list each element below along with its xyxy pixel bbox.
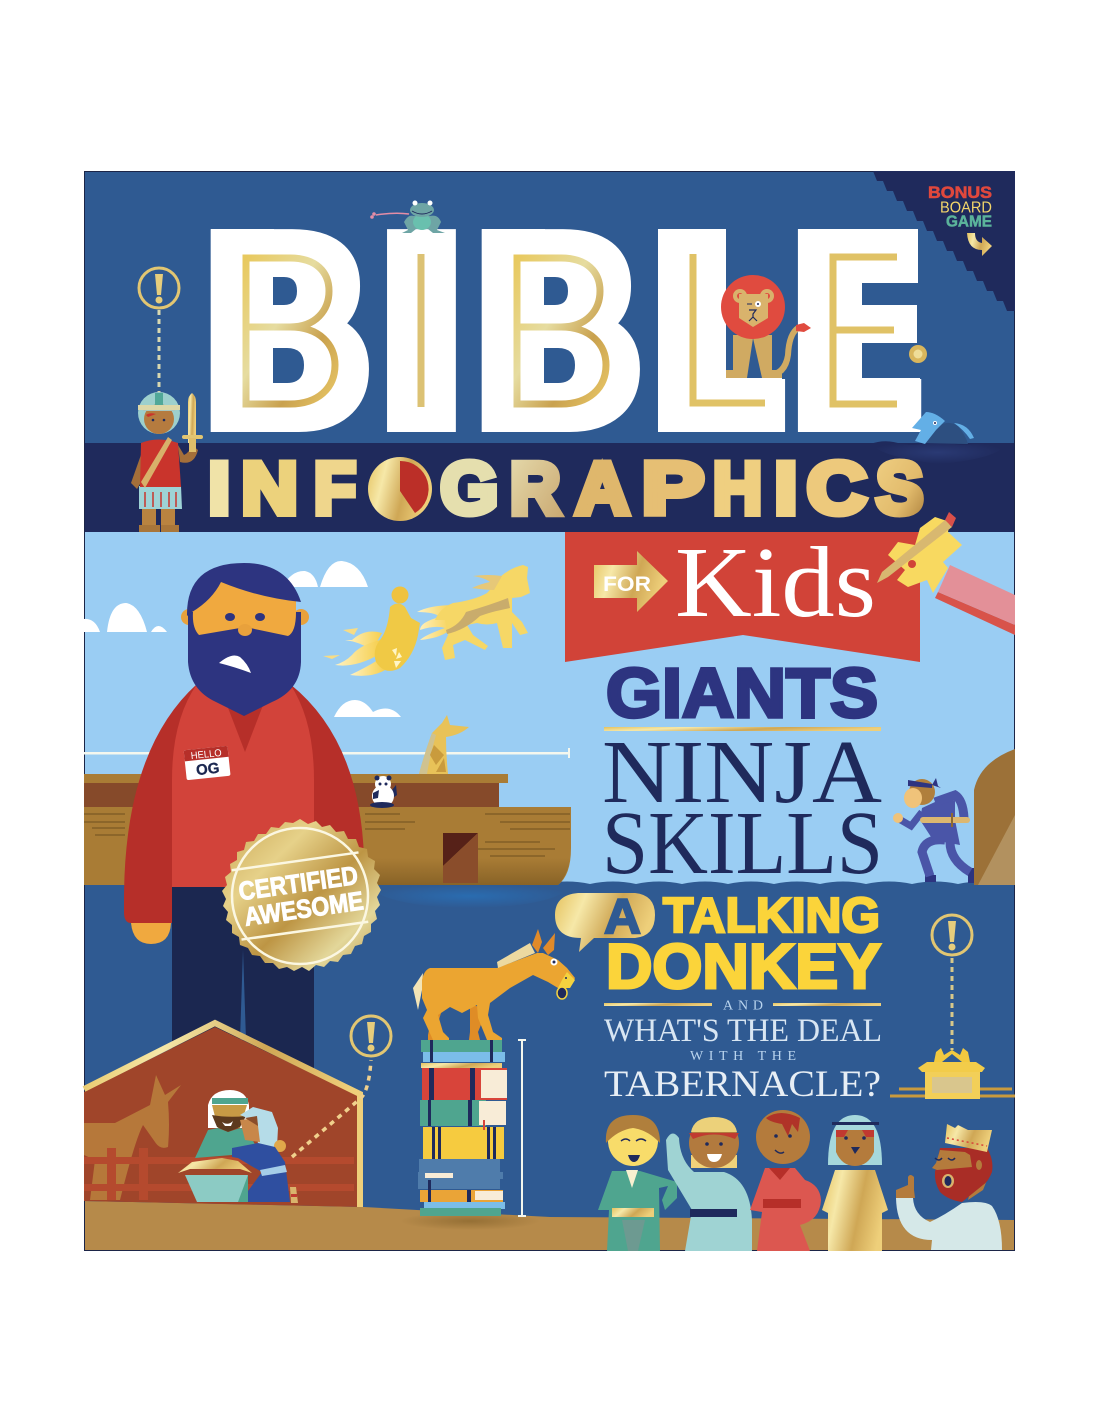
- title word BIBLE: B: [206, 185, 369, 476]
- icon: exclamation marker at stable: [351, 1016, 391, 1056]
- icon: exclamation marker and dashed line above soldier: [139, 268, 179, 392]
- gap between Og's legs: [240, 950, 246, 1040]
- certified awesome seal: AWESOME: [242, 885, 365, 932]
- certified awesome seal: CERTIFIED: [237, 860, 360, 906]
- child in gold robe: [822, 1115, 888, 1251]
- certified awesome seal: [222, 819, 381, 971]
- title word INFOGRAPHICS: H: [713, 447, 762, 529]
- ark: [84, 774, 571, 885]
- child waving in light blue: [666, 1117, 752, 1251]
- fish leaping from water: [870, 412, 1005, 464]
- title word INFOGRAPHICS: P: [642, 447, 704, 529]
- heading and what's the deal with the tabernacle: AND: [723, 998, 763, 1014]
- beard: [188, 612, 301, 716]
- title word Kids: Kids: [675, 526, 876, 638]
- title word INFOGRAPHICS: F: [314, 449, 356, 530]
- face: [192, 578, 296, 640]
- speech bubble with letter A: [555, 890, 655, 952]
- title word INFOGRAPHICS: A: [576, 447, 629, 529]
- dashed line to marker: [292, 1060, 371, 1157]
- sleeves and body: [124, 684, 364, 923]
- hand: [131, 923, 171, 944]
- icon: frog on letter I: [370, 200, 445, 233]
- heading TALKING DONKEY: TALKING: [663, 889, 880, 943]
- gold inline strokes in BIBLE: [246, 254, 897, 407]
- title word BIBLE: I: [381, 185, 462, 476]
- horizon line: [84, 748, 570, 758]
- heading NINJA SKILLS: SKILLS: [602, 794, 883, 893]
- nose: [238, 624, 252, 636]
- flaming chariot and horse: [323, 565, 530, 676]
- name tag HELLO OG: OG: [195, 760, 220, 779]
- hand with pencil: [877, 512, 1015, 635]
- gold ring on E: [909, 345, 927, 363]
- red banner: [565, 532, 920, 662]
- title word BIBLE: [206, 185, 924, 476]
- Mary: [232, 1107, 298, 1203]
- title word BIBLE: E: [794, 185, 920, 476]
- title word INFOGRAPHICS: G: [440, 447, 498, 529]
- child in red robe: [750, 1110, 821, 1251]
- ninja running: [893, 778, 977, 883]
- title word INFOGRAPHICS: I: [774, 449, 797, 530]
- FOR arrow: FOR: [603, 573, 651, 596]
- name tag HELLO OG: [184, 746, 231, 780]
- cover background bands: [84, 171, 1015, 1251]
- heading and what's the deal with the tabernacle: TABERNACLE?: [604, 1064, 881, 1105]
- icon: exclamation marker over ark of covenant: [932, 915, 972, 1050]
- bonus board game corner: BONUS: [928, 184, 992, 202]
- bonus board game corner: BOARD: [940, 200, 992, 216]
- king: [896, 1124, 1002, 1250]
- mouth: [219, 655, 251, 673]
- child in green robe: [598, 1115, 677, 1251]
- eyes: [225, 613, 265, 621]
- bonus board game corner: GAME: [946, 214, 992, 230]
- title word INFOGRAPHICS: C: [807, 447, 867, 529]
- title word INFOGRAPHICS: N: [242, 448, 298, 529]
- Joseph: [195, 1090, 257, 1158]
- talking donkey: [413, 929, 575, 1040]
- ear left: [181, 609, 197, 625]
- fence: [84, 1148, 354, 1200]
- soldier with sword: [131, 392, 203, 532]
- speech bubble with letter A: A: [604, 890, 641, 944]
- heading TALKING DONKEY: [606, 889, 881, 1002]
- heading NINJA SKILLS: NINJA: [602, 723, 882, 822]
- rock at right: [974, 749, 1015, 885]
- title word INFOGRAPHICS: S: [876, 449, 923, 530]
- heading GIANTS: GIANTS: [606, 654, 878, 732]
- legs: [172, 880, 314, 1080]
- heading TALKING DONKEY: DONKEY: [606, 932, 881, 1002]
- icon: pie chart letter O: [368, 457, 432, 521]
- heading and what's the deal with the tabernacle: [604, 998, 882, 1105]
- title word INFOGRAPHICS: R: [510, 448, 560, 530]
- FOR arrow: [594, 551, 668, 612]
- giraffe on the ark: [419, 715, 469, 774]
- clouds: [84, 561, 401, 717]
- title word INFOGRAPHICS: [208, 447, 923, 530]
- giant Og character: [124, 563, 364, 1080]
- heading and what's the deal with the tabernacle: WHAT'S THE DEAL: [604, 1013, 882, 1049]
- ark of the covenant: [890, 1048, 1015, 1099]
- title word INFOGRAPHICS: I: [208, 448, 230, 529]
- lion between L and E: [721, 275, 811, 378]
- title word BIBLE: B: [477, 185, 640, 476]
- hair: [187, 563, 301, 616]
- collar: [225, 700, 265, 752]
- stack of books: [400, 1040, 540, 1230]
- donkey silhouette: [84, 1075, 181, 1200]
- heading and what's the deal with the tabernacle: WITH THE: [690, 1049, 796, 1064]
- manger: [178, 1158, 252, 1202]
- nativity stable: [84, 1023, 371, 1207]
- title word BIBLE: L: [654, 185, 782, 476]
- panda: [370, 776, 397, 808]
- ear right: [293, 609, 309, 625]
- sweater front: [172, 684, 314, 887]
- bonus board game corner: [873, 171, 1015, 311]
- name tag HELLO OG: HELLO: [190, 748, 222, 762]
- heading NINJA SKILLS: [602, 723, 883, 893]
